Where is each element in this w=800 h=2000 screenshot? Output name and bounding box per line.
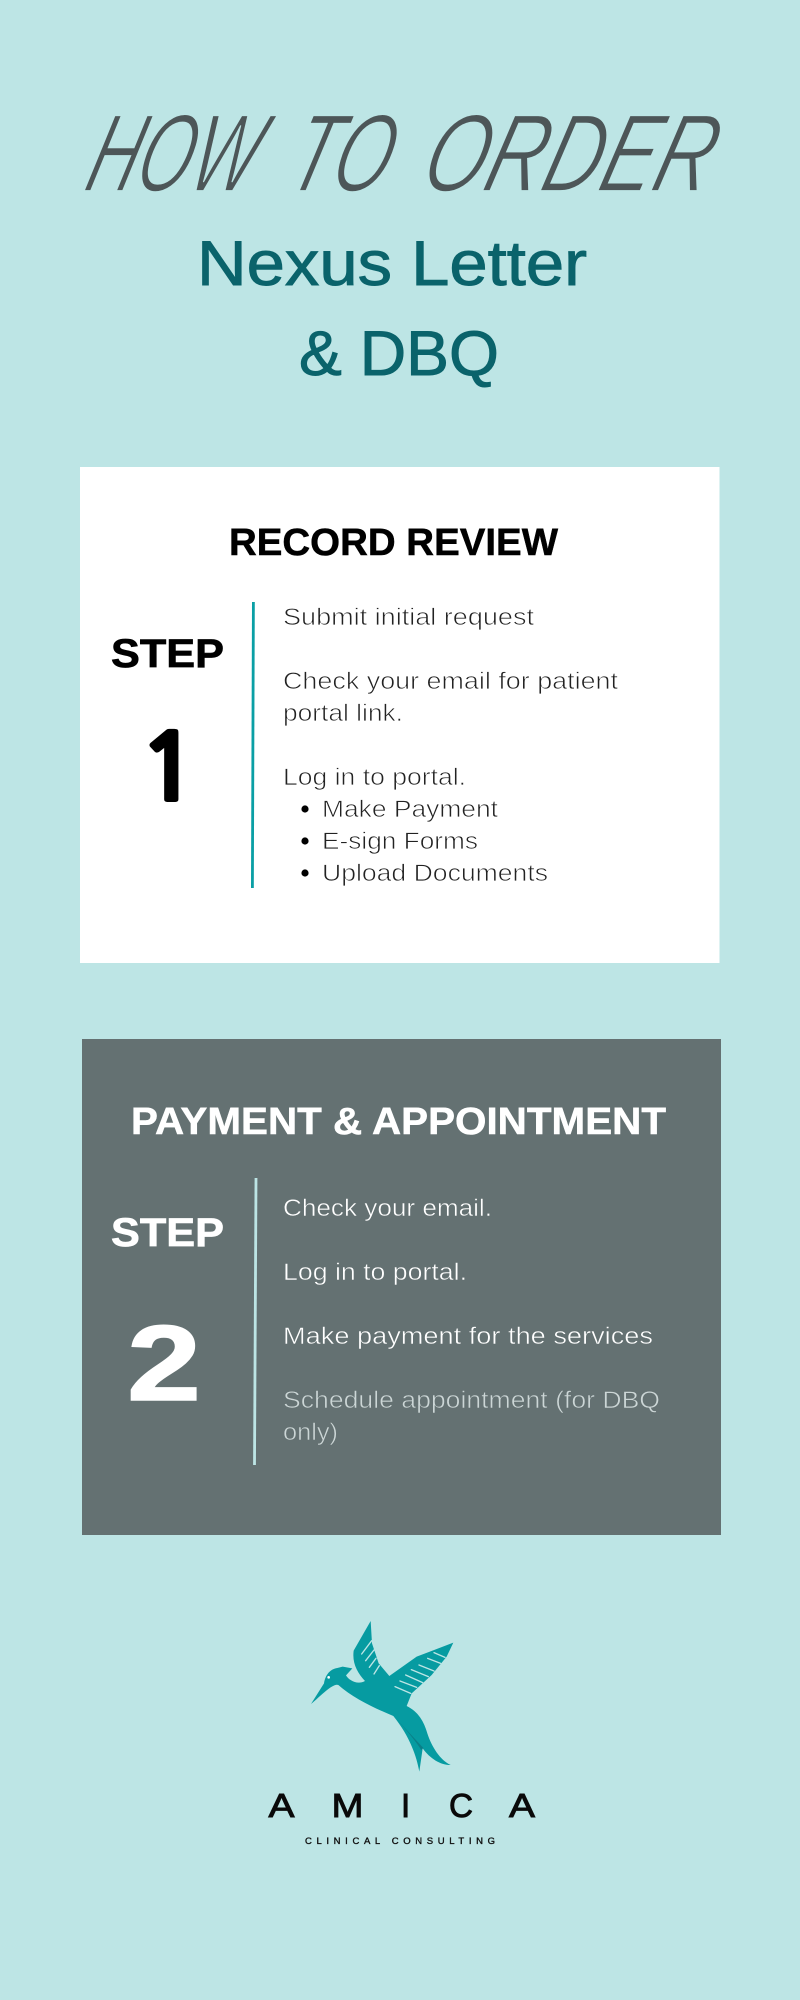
subtitle: & DBQ (299, 319, 499, 389)
heading: record review: RECORD REVIEW (229, 522, 558, 564)
heading: payment and appointment: PAYMENT & APPOINTMENT (131, 1101, 666, 1143)
step 2 instructions: Check your email. (283, 1195, 492, 1222)
step 1 instructions: Check your email for patient (283, 668, 618, 695)
logo: amica clinical consulting (268, 1621, 535, 1847)
title: how to order (75, 91, 735, 215)
step label: STEP (111, 1211, 224, 1255)
tagline: CLINICAL CONSULTING (305, 1836, 495, 1847)
step 1 instructions (283, 604, 618, 887)
step label: STEP (111, 632, 224, 676)
divider (254, 1178, 256, 1465)
wordmark: amica: A (268, 1787, 294, 1824)
subtitle (197, 229, 587, 389)
wordmark: amica: C (449, 1787, 473, 1824)
wordmark: amica: M (332, 1787, 364, 1824)
step 2 instructions: only) (283, 1419, 338, 1446)
step 2 instructions: Schedule appointment (for DBQ (283, 1387, 660, 1414)
wordmark: amica (268, 1787, 535, 1824)
icon: hummingbird (311, 1621, 453, 1772)
panel: step 2 payment and appointment (82, 1039, 721, 1535)
wordmark: amica: A (509, 1787, 535, 1824)
step 2 instructions (283, 1195, 660, 1446)
step 2 instructions: Make payment for the services (283, 1323, 653, 1350)
step 1 instructions: Upload Documents (322, 860, 548, 887)
panel: step 1 record review (80, 467, 720, 963)
title: how to order: TO (277, 91, 413, 215)
subtitle: Nexus Letter (197, 229, 587, 299)
step 1 instructions: Make Payment (322, 796, 498, 823)
wordmark: amica: I (401, 1787, 410, 1824)
step number 2: 2 (127, 1303, 201, 1423)
divider (252, 602, 253, 888)
title: how to order: HOW (75, 91, 284, 215)
step 2 instructions: Log in to portal. (283, 1259, 467, 1286)
step 1 instructions: E-sign Forms (322, 828, 478, 855)
step 1 instructions: Log in to portal. (283, 764, 466, 791)
step 1 instructions: Submit initial request (283, 604, 534, 631)
step 1 instructions: portal link. (283, 700, 403, 727)
step number 1: 1 (138, 723, 200, 814)
